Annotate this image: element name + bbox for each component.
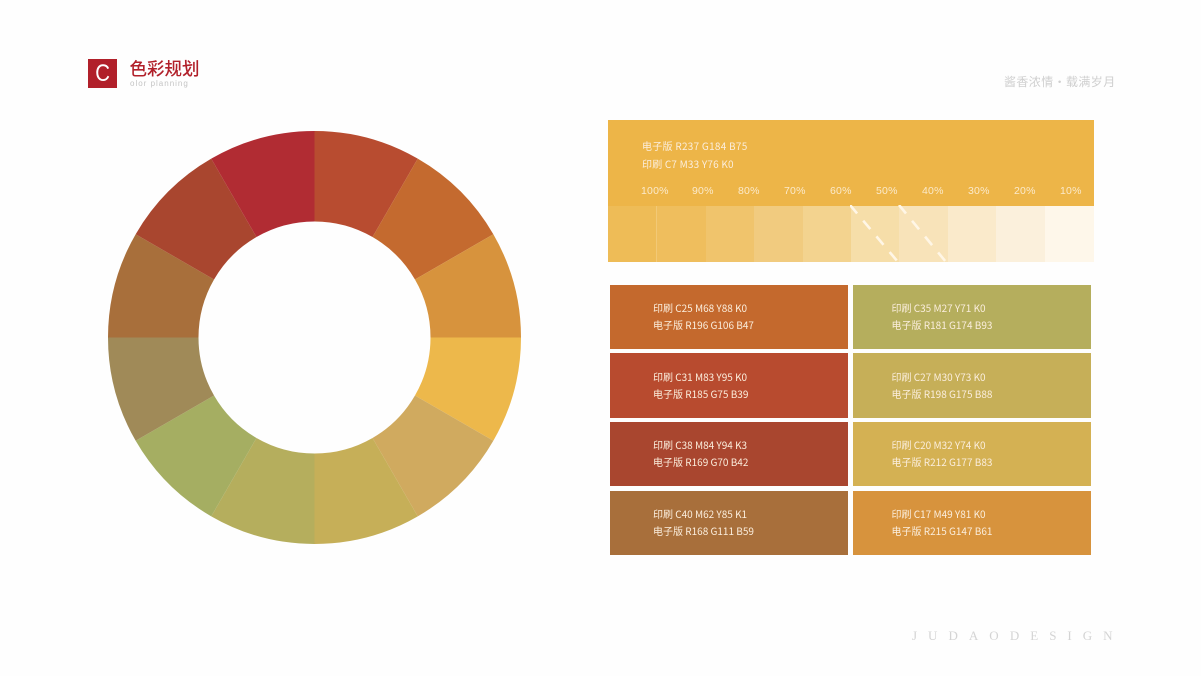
header: section logo and title (88, 56, 200, 88)
card: gold: 印刷 C20 M32 Y74 K0 (892, 437, 986, 452)
text: 50% (876, 185, 898, 197)
card: gold: 电子版 R212 G177 B83 (892, 454, 992, 469)
text: 80% (738, 185, 760, 197)
card: mustard (853, 353, 1091, 418)
card: amber: 电子版 R215 G147 B61 (892, 523, 992, 538)
card: brown (610, 491, 848, 555)
card: brick red (610, 353, 848, 418)
card: gold (853, 422, 1091, 486)
card: dark red (610, 422, 848, 486)
text: 60% (830, 185, 852, 197)
card: mustard: 电子版 R198 G175 B88 (892, 386, 992, 401)
yellow colour values: 印刷 C7 M33 Y76 K0 (642, 156, 734, 171)
card: olive: 电子版 R181 G174 B93 (892, 317, 992, 332)
card: dark red: 印刷 C38 M84 Y94 K3 (653, 437, 747, 452)
tint swatches (608, 206, 1094, 262)
text: 40% (922, 185, 944, 197)
card: orange (610, 285, 848, 349)
tagline: 酱香浓情·载满岁月 (1004, 73, 1116, 90)
tint percentage labels (641, 185, 1082, 197)
panel: main yellow tint scale (608, 120, 1094, 206)
card: mustard: 印刷 C27 M30 Y73 K0 (892, 369, 986, 384)
card: amber (853, 491, 1091, 555)
text: 100% (641, 185, 669, 197)
card: dark red: 电子版 R169 G70 B42 (653, 454, 748, 469)
card: orange: 印刷 C25 M68 Y88 K0 (653, 300, 747, 315)
dashed diagonal lines (850, 205, 946, 262)
footer brand text: JUDAO DESIGN (912, 628, 1124, 643)
donut colour wheel (108, 131, 521, 544)
main yellow block (608, 120, 1094, 206)
text: 10% (1060, 185, 1082, 197)
card: olive (853, 285, 1091, 349)
panel: colour cards (610, 285, 1091, 555)
text: 30% (968, 185, 990, 197)
card: orange: 电子版 R196 G106 B47 (653, 317, 754, 332)
heading: colour planning: 色彩规划 (130, 56, 200, 81)
text: 70% (784, 185, 806, 197)
card: amber: 印刷 C17 M49 Y81 K0 (892, 506, 986, 521)
card: brown: 印刷 C40 M62 Y85 K1 (653, 506, 747, 521)
card: olive: 印刷 C35 M27 Y71 K0 (892, 300, 986, 315)
card: brick red: 电子版 R185 G75 B39 (653, 386, 748, 401)
card: brick red: 印刷 C31 M83 Y95 K0 (653, 369, 747, 384)
icon: red C badge: C (95, 60, 110, 87)
icon: red C badge (88, 59, 117, 88)
yellow colour values: 电子版 R237 G184 B75 (642, 138, 748, 153)
subheading: olor planning (130, 79, 189, 88)
text: 20% (1014, 185, 1036, 197)
card: brown: 电子版 R168 G111 B59 (653, 523, 754, 538)
yellow colour values (642, 138, 748, 171)
text: 90% (692, 185, 714, 197)
